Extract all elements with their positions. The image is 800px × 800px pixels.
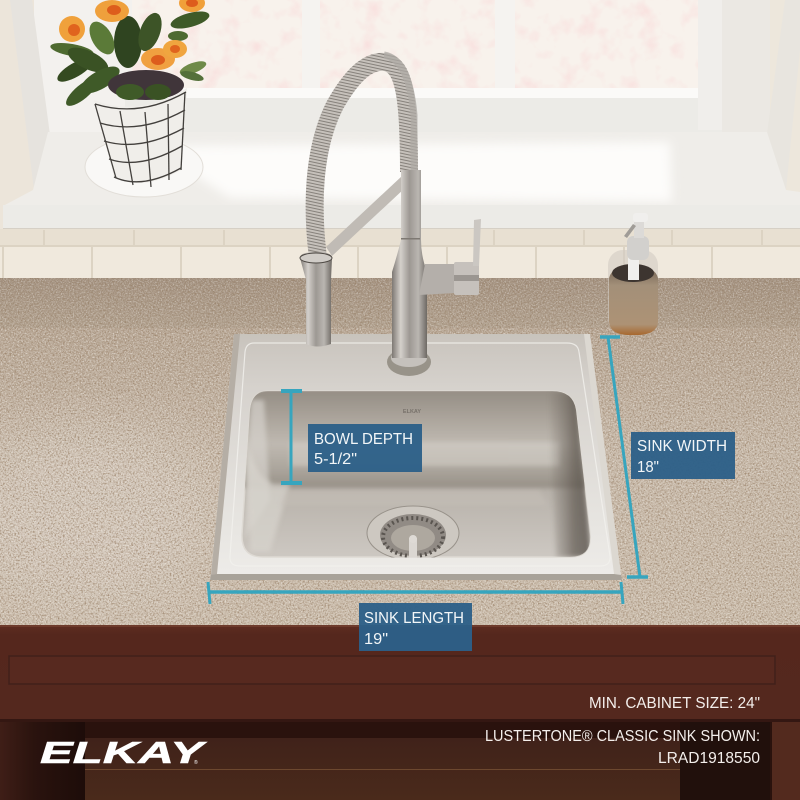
logo: Elkay: ® bbox=[194, 759, 198, 766]
label: sink length bbox=[359, 603, 472, 651]
note: model shown: LUSTERTONE® CLASSIC SINK SHOWN: bbox=[485, 728, 760, 745]
dimension: sink length arrow bbox=[208, 582, 623, 604]
background: window glass with blossoms bbox=[0, 0, 800, 110]
sink deck bbox=[210, 334, 622, 580]
potted plant bbox=[49, 0, 211, 197]
wire basket bbox=[95, 92, 186, 187]
sink inner rim bbox=[230, 343, 610, 566]
toe-kick and floor bbox=[0, 722, 800, 800]
note: model shown bbox=[485, 728, 760, 767]
granite countertop bbox=[0, 278, 800, 625]
window frame bbox=[32, 0, 784, 135]
window sill bbox=[3, 132, 800, 230]
sink bbox=[210, 334, 622, 580]
saucer bbox=[85, 137, 203, 197]
logo: Elkay bbox=[40, 735, 208, 770]
pot bbox=[94, 88, 187, 183]
logo: Elkay: ELKAY bbox=[40, 735, 208, 770]
subway tile backsplash bbox=[0, 229, 800, 279]
label: bowl depth bbox=[308, 424, 422, 472]
wall tile at window sides bbox=[0, 0, 800, 230]
note: minimum cabinet size: MIN. CABINET SIZE: 24" bbox=[589, 695, 760, 712]
pull-down faucet bbox=[300, 55, 481, 376]
label: sink width: SINK WIDTH bbox=[637, 438, 727, 455]
dimension: sink width arrow bbox=[600, 337, 648, 577]
drain bbox=[367, 506, 459, 560]
foliage bbox=[49, 8, 211, 110]
label: bowl depth: BOWL DEPTH bbox=[314, 431, 413, 448]
label: sink length: 19" bbox=[364, 631, 388, 648]
label: bowl depth: 5-1/2" bbox=[314, 451, 357, 468]
brand mark on sink: ELKAY bbox=[403, 409, 421, 415]
faucet body bbox=[392, 170, 427, 356]
sink bowl bbox=[242, 391, 590, 557]
note: model shown: LRAD1918550 bbox=[658, 750, 760, 767]
spray head bbox=[300, 252, 332, 346]
hose bbox=[315, 62, 409, 258]
label: sink length: SINK LENGTH bbox=[364, 610, 464, 627]
soap dispenser bbox=[608, 213, 658, 335]
dimension: bowl depth arrow bbox=[281, 391, 302, 483]
soil bbox=[108, 70, 184, 100]
cabinet front bbox=[0, 625, 800, 722]
support arm bbox=[326, 176, 405, 256]
faucet lever handle bbox=[419, 219, 481, 295]
flowers bbox=[59, 0, 205, 70]
label: sink width bbox=[631, 432, 735, 479]
label: sink width: 18" bbox=[637, 459, 659, 476]
